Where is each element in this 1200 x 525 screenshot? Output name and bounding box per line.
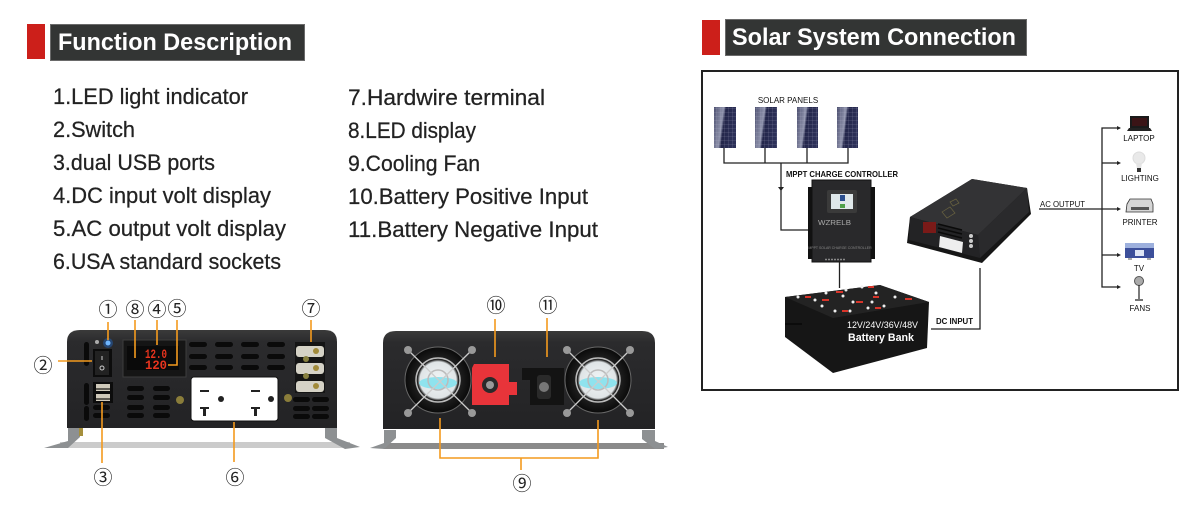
text block: function list 7 to 11: 9.Cooling Fan [348,151,480,176]
icon: mounting feet rear [370,430,668,449]
text block: function list 1 to 6: 2.Switch [53,117,135,142]
callouts: front view numbers: ② [33,351,53,378]
callouts: front view numbers: ③ [93,463,113,490]
icon: right cooling fan [563,346,634,417]
icon: fan [1134,276,1144,300]
icon: TV [1125,243,1154,259]
callouts: rear view numbers: ⑨ [512,469,532,496]
icon: battery positive terminal [472,364,517,405]
icon: charge controller: WZRELB [818,218,851,227]
text block: function list 7 to 11: 7.Hardwire terminal [348,85,545,110]
callouts: front view numbers: ⑤ [167,294,187,321]
text block: function list 1 to 6: 6.USA standard sockets [53,249,281,274]
icon: rocker switch [93,349,112,377]
icon: left cooling fan [404,346,476,417]
callouts: rear view numbers: ⑩ [486,291,506,318]
icon: charge controller: MPPT SOLAR CHARGE CONTROLLER [808,246,872,250]
callouts: rear view numbers: ⑪ [538,291,558,318]
callouts: front view numbers [33,294,321,490]
wiring: panels to controller [724,148,848,230]
text block: function list 7 to 11 [348,85,598,242]
icon: hardwire terminal [295,342,325,393]
callouts: front view numbers: ① [98,295,118,322]
text block: function list 7 to 11: 11.Battery Negative Input [348,217,598,242]
callouts: front view numbers: ⑥ [225,463,245,490]
icon: battery bank [785,285,929,373]
icon: LED display: 120 [145,358,167,373]
icon: light bulb [1133,152,1145,172]
heading: Solar System Connection: Solar System Connection [732,24,1016,51]
wiring: controller to battery [838,262,840,288]
text block: function list 1 to 6: 5.AC output volt display [53,216,286,241]
wiring: AC output bus [1039,126,1121,289]
label: fans: FANS [1130,304,1150,313]
icon: USA standard sockets [176,377,292,421]
icon: battery bank: 12V/24V/36V/48V [847,320,919,331]
heading: Function Description [27,24,304,60]
callouts: rear view leader lines [440,318,598,470]
label: MPPT charge controller: MPPT CHARGE CONTROLLER [786,169,898,179]
icon: LED indicators [95,338,113,348]
icon: solar panels [714,107,858,148]
heading: Function Description: Function Description [58,29,292,56]
label: lighting: LIGHTING [1121,174,1159,183]
text block: function list 7 to 11: 10.Battery Positive Input [348,184,588,209]
icon: battery negative terminal [522,368,564,405]
panel: connection diagram frame [702,71,1178,390]
callouts: front view leader lines [58,320,311,463]
callouts: front view numbers: ⑧ [125,295,145,322]
icon: charge controller [808,180,875,262]
icon: inverter isometric [907,179,1031,263]
icon: front vents [84,342,329,421]
text block: function list 1 to 6: 3.dual USB ports [53,150,215,175]
panel: inverter rear view [370,331,668,449]
label: laptop: LAPTOP [1123,134,1155,143]
icon: battery bank: Battery Bank [848,332,915,344]
icon: dual USB ports [93,382,113,403]
text block: function list 1 to 6: 1.LED light indicator [53,84,248,109]
text block: function list 7 to 11: 8.LED display [348,118,476,143]
icon: LED display [123,340,186,377]
icon: laptop [1127,116,1152,131]
icon: inverter rear body [383,331,655,429]
callouts: front view numbers: ④ [147,295,167,322]
panel: inverter front view [44,330,360,449]
callouts: front view numbers: ⑦ [301,294,321,321]
label: TV: TV [1134,264,1145,273]
label: solar panels: SOLAR PANELS [758,96,818,105]
label: DC input: DC INPUT [936,317,973,326]
text block: function list 1 to 6: 4.DC input volt display [53,183,271,208]
heading: Solar System Connection [702,20,1026,56]
icon: LED display: 12.0 [145,347,167,362]
icon: printer [1126,199,1153,212]
label: AC output: AC OUTPUT [1040,199,1085,209]
icon: inverter front body [67,330,337,428]
text block: function list 1 to 6 [53,84,286,274]
callouts: rear view numbers [486,291,558,496]
icon: mounting feet front [44,428,360,449]
wiring: DC input [931,268,980,329]
label: printer: PRINTER [1122,218,1158,227]
